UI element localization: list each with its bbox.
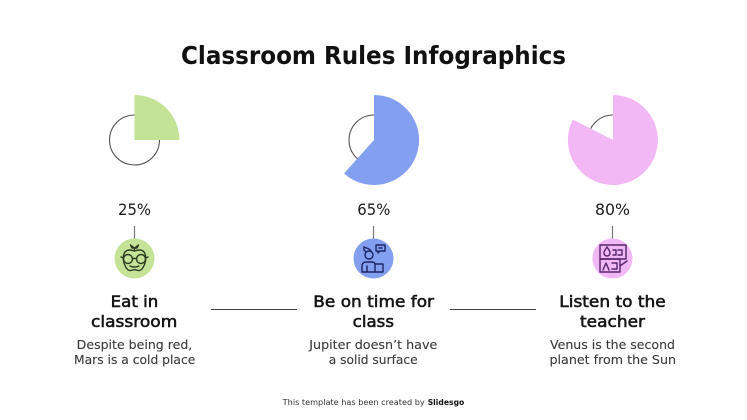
description <box>550 337 676 367</box>
heading: class <box>353 312 394 331</box>
divider line left <box>211 308 297 310</box>
heading: Be on time for <box>313 292 434 311</box>
chart: 65% pie <box>344 95 419 185</box>
icon: student and speech bubble <box>354 238 394 278</box>
description: Jupiter doesn’t have <box>308 337 438 352</box>
title: Classroom Rules Infographics <box>181 41 566 70</box>
description: Mars is a cold place <box>74 352 196 367</box>
value: 25%: 25% <box>118 200 151 219</box>
panel: eat in classroom <box>74 95 196 367</box>
panel: be on time for class <box>308 95 438 367</box>
description <box>308 337 438 367</box>
connector line <box>372 226 374 239</box>
connector line <box>612 226 614 239</box>
heading: Eat in <box>111 292 158 311</box>
description <box>74 337 196 367</box>
description: a solid surface <box>329 352 418 367</box>
description: planet from the Sun <box>550 352 676 367</box>
icon: classroom board <box>592 238 632 278</box>
heading <box>91 292 177 331</box>
heading <box>559 292 666 331</box>
chart: 80% pie <box>568 95 658 185</box>
footer credit: This template has been created by <box>282 398 425 407</box>
description: Despite being red, <box>77 337 192 352</box>
heading <box>313 292 434 331</box>
heading: teacher <box>580 312 645 331</box>
value: 80%: 80% <box>595 200 630 219</box>
heading: classroom <box>91 312 177 331</box>
icon: apple with glasses <box>114 238 154 278</box>
footer credit: Slidesgo <box>428 398 465 407</box>
value: 65%: 65% <box>357 200 390 219</box>
panel: listen to the teacher <box>550 95 676 367</box>
chart: 25% pie <box>110 95 180 165</box>
heading: Listen to the <box>559 292 666 311</box>
connector line <box>134 226 136 239</box>
divider line right <box>450 308 536 310</box>
description: Venus is the second <box>550 337 675 352</box>
